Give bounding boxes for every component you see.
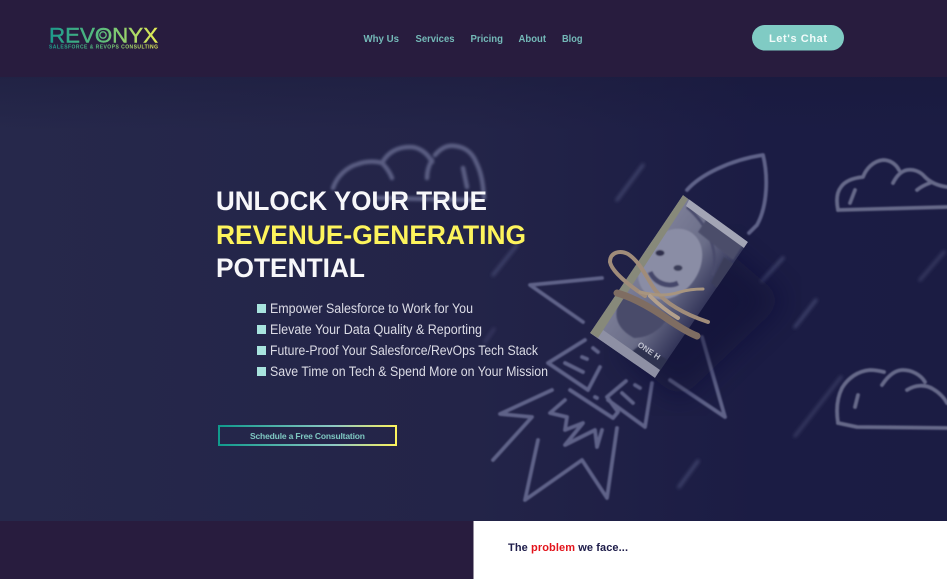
rocket illustration (493, 155, 766, 500)
lower band (632, 344, 667, 370)
heading: POTENTIAL (216, 253, 365, 283)
navigation: Why Us (364, 33, 399, 45)
navigation: Pricing (470, 33, 503, 45)
band pattern (698, 220, 742, 260)
rocket nose (687, 155, 766, 233)
motion streaks (485, 165, 944, 487)
portrait head (638, 228, 703, 300)
rocket flames (493, 390, 617, 500)
header bar (0, 0, 947, 77)
navigation: Services (416, 33, 455, 45)
cloud: top right (837, 160, 947, 210)
bullet list (257, 301, 548, 379)
left edge strip (590, 195, 688, 338)
bullet 2: Elevate Your Data Quality & Reporting (270, 322, 482, 337)
rolled dollar bill (590, 195, 766, 398)
panel: problem statement (474, 521, 947, 579)
left fin (530, 278, 602, 322)
cloud: bottom right (837, 370, 947, 428)
bullet 4: Save Time on Tech & Spend More on Your Mission (270, 364, 548, 379)
navigation: About (518, 33, 546, 45)
twine bow (610, 252, 708, 336)
button: Schedule a Free Consultation (219, 426, 396, 445)
button: Let's Chat (752, 25, 844, 50)
problem heading: The problem we face... (508, 542, 628, 554)
navigation (364, 33, 582, 45)
cloud: behind heading (333, 146, 484, 200)
logo: REVONYX (49, 24, 158, 48)
bottom light band (590, 325, 660, 378)
right fin (670, 337, 725, 417)
rocket nozzle (548, 340, 652, 427)
bottom band (0, 521, 947, 579)
bullet 1: Empower Salesforce to Work for You (270, 301, 473, 316)
heading (216, 186, 526, 283)
heading: UNLOCK YOUR TRUE (216, 186, 487, 216)
button: Schedule a Free Consultation: Schedule a Free Consultation (250, 431, 365, 441)
logo subtitle: SALESFORCE & REVOPS CONSULTING (49, 44, 158, 50)
hero background (0, 77, 947, 521)
bill body: ONE H (636, 340, 662, 362)
bill body (590, 195, 748, 378)
bullet 3: Future-Proof Your Salesforce/RevOps Tech Stack (270, 343, 538, 358)
button: Let's Chat: Let's Chat (769, 33, 827, 45)
heading: REVENUE-GENERATING (216, 220, 526, 250)
navigation: Blog (562, 33, 582, 45)
top light band (686, 198, 748, 248)
coat shading (616, 298, 668, 338)
